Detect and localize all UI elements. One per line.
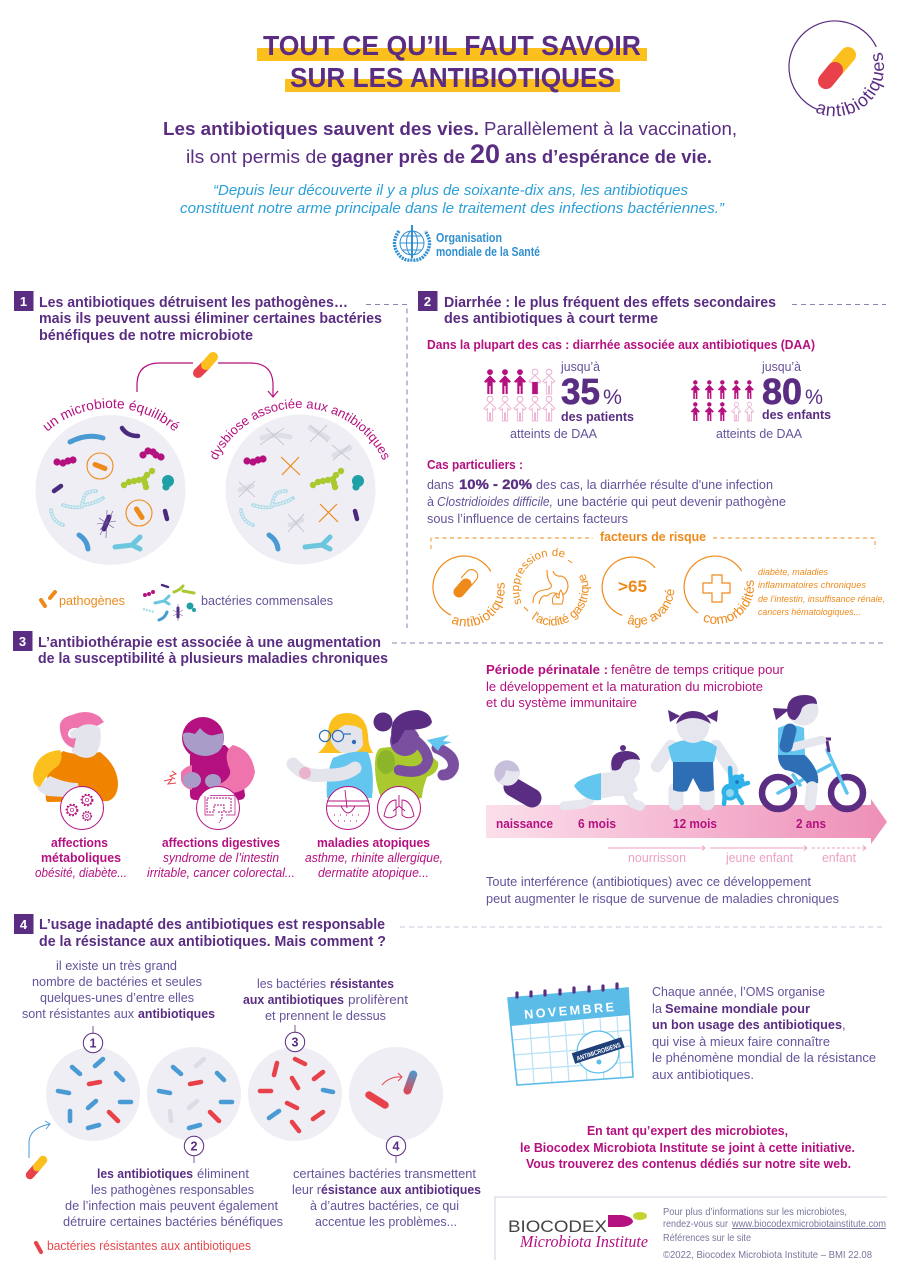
heading 4 (14, 914, 386, 950)
text: step 1: quelques-unes d’entre elles (40, 990, 194, 1005)
panel: section 4 (14, 914, 887, 1261)
labels: diseases: maladies atopiques (317, 835, 430, 850)
illustration: 12 months (657, 710, 748, 804)
stat: 80% children: 80 (762, 371, 802, 412)
icon: advanced age: âge avancé (628, 589, 674, 628)
arrow: timeline band: 2 ans (796, 816, 826, 831)
chart: step 1 bacteria: 1 (90, 1036, 97, 1050)
icon: pill with arrow (29, 1121, 50, 1175)
callout: Biocodex: le Biocodex Microbiota Institute se joint à cette initiative. (520, 1140, 855, 1155)
callout: Biocodex (520, 1123, 855, 1171)
chart: dysbiosis: dysbiose associée aux antibiotiques (210, 398, 388, 460)
icon: comorbidities: comorbidités (704, 580, 754, 624)
icon: gastric acid suppression (512, 548, 592, 626)
subheading: DAA: Dans la plupart des cas : diarrhée associée aux antibiotiques (DAA) (427, 337, 815, 352)
text: step 2: les pathogènes responsables (91, 1182, 254, 1197)
text: step 2: de l’infection mais peuvent également (65, 1198, 278, 1213)
heading 2 (418, 291, 776, 327)
arrow: timeline band: 6 mois (578, 816, 616, 831)
text: special cases: une bactérie qui peut devenir pathogène (557, 494, 786, 509)
arrow: timeline band: 12 mois (673, 816, 717, 831)
chart: step 4 bacteria (349, 1047, 443, 1163)
chart: dysbiosis (210, 398, 388, 564)
stat: 35% patients (484, 359, 634, 441)
text: step 2 (63, 1166, 283, 1229)
text: WHO week: Semaine mondiale pour (665, 1001, 810, 1016)
text: footer info: www.biocodexmicrobiotainstitute.com (731, 1219, 886, 1230)
title (257, 30, 647, 93)
icon: advanced age (602, 556, 674, 628)
illustration: newborn (494, 760, 532, 798)
icon: november calendar: NOVEMBRE (524, 1000, 615, 1022)
title: TOUT CE QU’IL FAUT SAVOIR (263, 30, 641, 61)
arrows: life stages (608, 846, 866, 865)
intro text (163, 118, 737, 169)
icon: november calendar (508, 984, 633, 1085)
text: WHO week: qui vise à mieux faire connaître (652, 1034, 830, 1049)
text: step 4: certaines bactéries transmettent (293, 1166, 476, 1181)
labels: diseases: irritable, cancer colorectal... (147, 865, 295, 880)
text: footer info: Pour plus d’informations sur les microbiotes, (663, 1207, 847, 1218)
text: perinatal period (486, 662, 785, 710)
text: interference (486, 874, 839, 906)
logo: Biocodex: Microbiota Institute (519, 1232, 648, 1251)
quote (180, 183, 725, 217)
illustration: metabolic disorders (33, 712, 118, 830)
text: special cases: des cas, la diarrhée résulte d'une infection (536, 477, 773, 492)
text: perinatal period: et du système immunitaire (486, 695, 637, 710)
text: special cases: 10% - 20% (459, 476, 533, 492)
arrows: life stages: enfant (822, 851, 856, 865)
text: step 1: antibiotiques (138, 1006, 215, 1021)
badge: antibiotiques (788, 20, 884, 116)
heading 3: 3 (19, 634, 26, 649)
text: interference: Toute interférence (antibiotiques) avec ce développement (486, 874, 811, 889)
text: footer info: rendez-vous sur (663, 1219, 729, 1230)
logo: Biocodex (508, 1212, 648, 1251)
logo: Biocodex: BIOCODEX (508, 1217, 607, 1236)
stat: 80% children: jusqu’à (761, 359, 802, 374)
logo: WHO (394, 225, 540, 260)
icon: teddy bear (722, 768, 748, 804)
legend: commensal bacteria (143, 585, 333, 621)
text: comorbidity examples: inflammatoires chroniques (758, 580, 866, 591)
text: step 4: ésistance aux antibiotiques (321, 1182, 481, 1197)
text: step 1 (22, 958, 215, 1021)
icon: skin (326, 786, 370, 830)
arrow: timeline band: naissance (496, 816, 553, 831)
panel: section 1 (14, 291, 408, 628)
stat: 80% children: atteints de DAA (716, 426, 802, 441)
text: WHO week: , (842, 1017, 846, 1032)
badge: antibiotiques: antibiotiques (816, 52, 884, 116)
arrows: life stages: nourrisson (628, 851, 686, 865)
heading 4: L’usage inadapté des antibiotiques est responsable (39, 917, 385, 933)
illustration: 6 months (564, 745, 640, 806)
labels: diseases: dermatite atopique... (318, 865, 429, 880)
illustration: digestive disorders (164, 717, 255, 830)
chart: step 1 bacteria (46, 1026, 140, 1141)
text: step 4: leur r (292, 1182, 322, 1197)
heading 2: Diarrhée : le plus fréquent des effets secondaires (444, 295, 776, 311)
chart: step 3 bacteria (248, 1025, 342, 1141)
legend: pathogens: pathogènes (59, 593, 125, 608)
intro text: 20 (470, 139, 500, 169)
text: comorbidity examples: cancers hématologiques... (758, 607, 861, 618)
text: footer info (663, 1207, 886, 1261)
labels: diseases: affections digestives (162, 835, 280, 850)
chart: step 4 bacteria: 4 (393, 1140, 400, 1154)
heading: risk factors: facteurs de risque (600, 529, 706, 544)
text: step 3: résistantes (330, 976, 394, 991)
callout: Biocodex: En tant qu’expert des microbiotes, (587, 1123, 788, 1138)
text: step 2: les antibiotiques (97, 1166, 193, 1181)
text: step 4: accentue les problèmes... (315, 1214, 457, 1229)
text: comorbidity examples: diabète, maladies (758, 567, 828, 578)
heading 4: de la résistance aux antibiotiques. Mais comment ? (39, 934, 386, 950)
callout: Biocodex: Vous trouverez des contenus dédiés sur notre site web. (526, 1156, 851, 1171)
intro text: gagner près de (331, 146, 465, 167)
quote: “Depuis leur découverte il y a plus de soixante-dix ans, les antibiotiques (213, 183, 688, 199)
icon: intestine (196, 786, 240, 830)
heading 1 (14, 291, 382, 344)
heading 2: des antibiotiques à court terme (444, 311, 658, 327)
text: step 1: il existe un très grand (56, 958, 177, 973)
heading 3: L’antibiothérapie est associée à une augmentation (38, 635, 381, 651)
text: special cases (427, 457, 786, 526)
chart: balanced microbiota: un microbiote équilibré (43, 398, 180, 431)
heading 3: de la susceptibilité à plusieurs maladies chroniques (38, 651, 388, 667)
text: step 3 (243, 976, 408, 1023)
arrow: timeline band (486, 799, 887, 844)
text: step 3: aux antibiotiques (243, 992, 344, 1007)
text: WHO week: la (652, 1001, 663, 1016)
illustration: 2 years (762, 694, 863, 809)
text: comorbidity examples (758, 567, 885, 618)
text: WHO week: aux antibiotiques. (652, 1067, 754, 1082)
labels: diseases (35, 835, 443, 880)
text: special cases: Clostridioides difficile, (437, 494, 553, 509)
stat: 35% patients: des patients (561, 409, 634, 424)
panel: section 3 (13, 631, 887, 906)
illustration: atopic diseases (293, 710, 453, 830)
text: perinatal period: fenêtre de temps critique pour (611, 662, 785, 677)
legend: commensal bacteria: bactéries commensales (201, 593, 333, 608)
quote: constituent notre arme principale dans le traitement des infections bactériennes.” (180, 201, 725, 217)
text: WHO week: Chaque année, l’OMS organise (652, 984, 825, 999)
text: step 4 (292, 1166, 481, 1229)
text: special cases: Cas particuliers : (427, 457, 523, 472)
arrow: antibiotic effect (137, 357, 278, 397)
text: footer info: Références sur le site (663, 1233, 751, 1244)
intro text: ils ont permis de (186, 146, 327, 167)
text: step 2: détruire certaines bactéries bénéfiques (63, 1214, 283, 1229)
legend: resistant bacteria: bactéries résistantes aux antibiotiques (47, 1239, 251, 1253)
stat: 35% patients: % (603, 386, 622, 409)
heading 1: mais ils peuvent aussi éliminer certaines bactéries (39, 311, 382, 327)
heading 4: 4 (20, 917, 28, 932)
logo: WHO: Organisation (436, 230, 502, 245)
logo: WHO: mondiale de la Santé (436, 244, 540, 259)
heading: risk factors (431, 529, 875, 549)
stat: 80% children: % (805, 386, 823, 409)
icon: november calendar: ANTIMICROBIENS (576, 1042, 622, 1063)
icon: lungs (378, 786, 420, 830)
chart: step 2 bacteria (147, 1047, 241, 1163)
intro text: Parallèlement à la vaccination, (484, 118, 737, 139)
text: special cases: dans (427, 477, 454, 492)
text: step 3: les bactéries (257, 976, 326, 991)
text: step 2: éliminent (197, 1166, 249, 1181)
text: WHO week: un bon usage des antibiotiques (652, 1017, 842, 1032)
footer (495, 1197, 887, 1261)
icon: antibiotics risk (432, 555, 505, 626)
labels: diseases: affections (51, 835, 108, 850)
stat: 35% patients: 35 (561, 371, 600, 412)
text: perinatal period: le développement et la maturation du microbiote (486, 679, 763, 694)
icon: gastric acid suppression: suppression de (512, 548, 565, 604)
chart: balanced microbiota (36, 398, 186, 565)
text: step 3: et prennent le dessus (265, 1008, 386, 1023)
icon: gastric acid suppression: l'acidité gastrique (532, 574, 592, 626)
text: WHO week (652, 984, 876, 1082)
heading 1: 1 (20, 294, 27, 309)
intro text: Les antibiotiques sauvent des vies. (163, 118, 479, 139)
text: special cases: sous l’influence de certains facteurs (427, 511, 628, 526)
text: perinatal period: Période périnatale : (486, 662, 608, 677)
stat: 35% patients: atteints de DAA (510, 426, 597, 441)
stat: 35% patients: jusqu’à (560, 359, 601, 374)
heading 1: Les antibiotiques détruisent les pathogènes… (39, 295, 348, 311)
arrows: life stages: jeune enfant (725, 851, 793, 865)
labels: diseases: syndrome de l’intestin (163, 850, 279, 865)
text: step 4: à d’autres bactéries, ce qui (310, 1198, 459, 1213)
heading 2: 2 (424, 294, 431, 309)
text: WHO week: le phénomène mondial de la résistance (652, 1050, 876, 1065)
chart: step 3 bacteria: 3 (292, 1036, 299, 1050)
labels: diseases: métaboliques (41, 850, 121, 865)
icon: comorbidities (683, 556, 754, 624)
chart: step 2 bacteria: 2 (191, 1140, 198, 1154)
heading 1: bénéfiques de notre microbiote (39, 328, 253, 344)
icon: gears (60, 786, 104, 830)
title: SUR LES ANTIBIOTIQUES (290, 62, 615, 93)
heading 3 (13, 631, 388, 667)
text: interference: peut augmenter le risque de survenue de maladies chroniques (486, 891, 839, 906)
stat: 80% children: des enfants (762, 407, 831, 422)
panel: section 2 (418, 291, 886, 628)
labels: diseases: asthme, rhinite allergique, (305, 850, 443, 865)
icon: antibiotics risk: antibiotiques (452, 582, 505, 626)
icon: advanced age: >65 (618, 577, 647, 596)
text: footer info: ©2022, Biocodex Microbiota Institute – BMI 22.08 (663, 1250, 872, 1261)
text: comorbidity examples: de l’intestin, insuffisance rénale, (758, 594, 885, 605)
text: step 3: prolifèrent (348, 992, 408, 1007)
labels: diseases: obésité, diabète... (35, 865, 127, 880)
intro text: ans d’espérance de vie. (505, 146, 712, 167)
stat: 80% children (691, 359, 831, 441)
text: step 1: sont résistantes aux (22, 1006, 134, 1021)
text: special cases: à (427, 494, 435, 509)
text: step 1: nombre de bactéries et seules (32, 974, 202, 989)
